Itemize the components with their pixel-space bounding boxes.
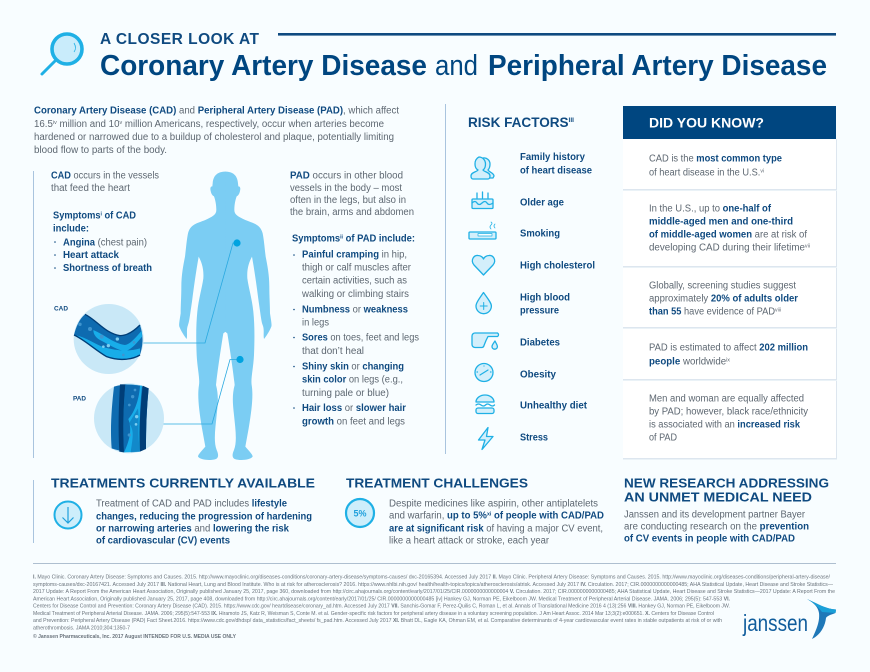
PAD description: often in the legs, but also in — [290, 195, 406, 206]
references: and Prevention: Peripheral Artery Disease (PAD) Fact Sheet.2016. https://www.cdc.gov/dhdsp/ data_statistics/fact_sheets/ fs_pad.htm. Accessed July 2017 XI. Bhatt DL, Eagle KA, Ohman EM, et al. Comparative determinants of 4-year cardiovascular event rates in stable outpatients at risk of or with — [33, 618, 722, 624]
title: Coronary Artery Disease — [100, 50, 427, 82]
card: 202 million — [623, 329, 837, 380]
illustration: CAD artery — [74, 304, 144, 374]
section: new research — [624, 476, 829, 544]
references: Medical Treatment of Peripheral Arterial Disease. JAMA. 2006; 295(5):547-553 IX. Hiramoto JS, Katz R, Weisman S, Conte M. et al. Gender-specific risk factors for peripheral artery disease in a voluntary screening population. J Am Heart Assoc. 2014 Mar 13;3(2):e000651. X. Centers for Disease Control — [33, 611, 714, 617]
risk: family history: Family history — [520, 152, 585, 163]
risk: family history: of heart disease — [520, 166, 592, 176]
title: Peripheral Artery Disease — [488, 50, 827, 82]
PAD symptoms list: certain activities, such as — [302, 276, 407, 286]
card: men and women equally affected: of PAD — [649, 432, 677, 444]
card: one-half of men: developing CAD during their lifetime — [649, 242, 809, 254]
icon: burger — [476, 395, 494, 414]
heading: risk factors: III — [569, 117, 574, 124]
PAD symptoms list: of PAD include: — [343, 234, 415, 244]
references — [33, 574, 835, 640]
references: 2017 Update: A Report From the American Heart Association, Originally published January 25, 2017, page 360, downloaded from http://circ.ahajournals.org/content/early/2017/01/25/CIR.0000000000000004 V. Circulation. 2017; CIR.0000000000000485; AHA Statistical Update, Heart Disease and Stroke Statistics—2017 Update: A Report From the — [33, 589, 835, 595]
intro text block: blood flow to parts of the body. — [34, 145, 167, 156]
PAD connector line — [163, 356, 244, 424]
references: atherothrombosis. JAMA 2010;304:1350-7 — [33, 626, 130, 632]
section: treatments currently available: Treatment of CAD and PAD includes lifestyle — [96, 498, 287, 510]
icon: down arrow — [54, 502, 82, 528]
risk: unhealthy diet: Unhealthy diet — [520, 400, 588, 412]
icon: lightning bolt — [478, 428, 493, 450]
icon: finger prick — [472, 333, 499, 349]
intro text block: 16.5 — [34, 119, 53, 130]
card: most common type — [623, 139, 837, 190]
card: 202 million: ix — [726, 358, 730, 364]
risk: family history — [520, 152, 592, 176]
section: new research: of CV events in people with CAD/PAD — [624, 534, 795, 544]
CAD symptoms list: include: — [53, 224, 89, 234]
PAD symptoms list: in legs — [302, 318, 329, 328]
PAD symptoms list: growth on feet and legs — [302, 416, 405, 428]
logo: janssen — [742, 599, 836, 639]
header: did you know: DID YOU KNOW? — [649, 114, 764, 130]
section: treatment challenges: like a heart attack or stroke, each year — [389, 536, 550, 546]
references: I. Mayo Clinic. Coronary Artery Disease: Symptoms and Causes. 2015. http://www.mayoclinic.org/diseases-conditions/coronary-artery-disease/symptoms-causes/ dxc-20165394. Accessed July 2017 II. Mayo Clinic. Peripheral Artery Disease: Symptoms and Causes. 2015. http://www.mayoclinic.org/diseases-conditions/peripheral-artery-disease/ — [33, 574, 831, 580]
risk: obesity: Obesity — [520, 370, 556, 380]
references: Centers for Disease Control and Prevention: Coronary Artery Disease (CAD). 2015. https://www.cdc.gov/ heartdisease/coronary_ad.htm. Accessed July 2017 VII. Sanchis-Gomar F, Perez-Quilis C, Roman L, et al. Annals of Translational Medicine 2016 4 (13):256 VIII. Hankey GJ, Norman PE, Eikelboom JW. — [33, 604, 730, 610]
PAD description: vessels in the body – most — [290, 183, 402, 194]
risk: diabetes: Diabetes — [520, 338, 560, 348]
icon: cigarette — [469, 222, 496, 239]
risk: high blood pressure: pressure — [520, 306, 559, 316]
section: treatments currently available: changes, reducing the progression of hardening — [96, 512, 312, 522]
title — [100, 31, 836, 82]
risk: high blood pressure: High blood — [520, 292, 570, 304]
human body silhouette — [179, 172, 272, 460]
section: treatments currently available — [51, 476, 315, 546]
PAD symptoms list: Numbness or weakness — [302, 304, 408, 316]
card: 20 percent of adults: Globally, screening studies suggest — [649, 280, 796, 292]
card: most common type: vi — [760, 168, 764, 174]
section: treatments currently available: or narrowing arteries and lowering the risk — [96, 524, 289, 534]
section: treatment challenges: TREATMENT CHALLENGES — [346, 476, 528, 490]
intro text block: Coronary Artery Disease (CAD) and Peripheral Artery Disease (PAD), which affect — [34, 106, 399, 116]
intro text block: v — [119, 120, 122, 126]
icon: birthday cake — [472, 192, 493, 208]
PAD description: the brain, arms and abdomen — [290, 207, 414, 218]
icon: family — [471, 157, 494, 179]
PAD symptoms list: that don’t heal — [302, 346, 364, 357]
CAD description: CAD occurs in the vessels — [51, 170, 159, 182]
section: new research: NEW RESEARCH ADDRESSING — [624, 476, 829, 490]
card: one-half of men: vii — [805, 244, 810, 250]
title: A CLOSER LOOK AT — [100, 31, 260, 48]
card: one-half of men — [623, 191, 837, 268]
PAD symptoms list: Hair loss or slower hair — [302, 403, 406, 414]
CAD description: that feed the heart — [51, 183, 130, 194]
section: treatments currently available: of cardiovascular (CV) events — [96, 536, 230, 546]
section: treatment challenges: of people with CAD/PAD — [491, 510, 604, 522]
card: one-half of men: of middle-aged women are at risk of — [649, 230, 807, 240]
CAD description — [51, 170, 159, 194]
references: American Heart Association, Originally published January 25, 2017, page 408, downloaded from http://circ.ahajournals.org/content/early/2017/01/25/ CIR.0000000000000485 [iv] Hankey GJ, Norman PE, Eikelboom JW. Medical Treatment of Peripheral Arterial Disease. JAMA. 2006; 295(5): 547-553 VI. — [33, 596, 731, 602]
references: © Janssen Pharmaceuticals, Inc. 2017 August INTENDED FOR U.S. MEDIA USE ONLY — [33, 633, 237, 640]
risk: smoking: Smoking — [520, 228, 560, 240]
card: most common type: CAD is the most common type — [649, 154, 782, 164]
CAD symptoms list: Symptoms — [53, 210, 104, 222]
risk: high cholesterol: High cholesterol — [520, 260, 595, 272]
intro text block — [34, 106, 399, 156]
section: new research: AN UNMET MEDICAL NEED — [624, 490, 812, 504]
CAD symptoms list: Angina (chest pain) — [63, 238, 147, 248]
heading: risk factors: RISK FACTORS — [468, 115, 568, 130]
section: treatment challenges: and warfarin, up to 5% — [389, 510, 489, 522]
card: most common type: of heart disease in the U.S. — [649, 168, 770, 178]
icon: 5 percent badge: 5% — [354, 508, 366, 518]
section: new research: Janssen and its development partner Bayer — [624, 510, 806, 520]
card: 20 percent of adults — [623, 268, 837, 328]
intro text block: hardened or narrowed due to a buildup of cholesterol and plaque, potentially limiting — [34, 132, 394, 143]
PAD symptoms list: ii — [340, 234, 343, 240]
PAD symptoms list: turning pale or blue) — [302, 388, 389, 399]
card: one-half of men: middle-aged men and one-third — [649, 216, 793, 228]
PAD symptoms list: Sores on toes, feet and legs — [302, 332, 419, 344]
icon: 5 percent badge — [346, 499, 374, 527]
PAD symptoms list — [292, 234, 419, 428]
PAD symptoms list: skin color on legs (e.g., — [302, 374, 403, 386]
icon: magnifying glass — [42, 34, 82, 74]
risk: high blood pressure — [520, 292, 570, 316]
PAD symptoms list: walking or climbing stairs — [301, 289, 409, 300]
PAD symptoms list: Symptoms — [292, 234, 343, 244]
illustration: PAD artery — [94, 383, 164, 453]
intro text block: million and 10 — [57, 119, 120, 130]
intro text block: million Americans, respectively, occur when arteries become — [122, 119, 384, 130]
logo: janssen: janssen — [742, 610, 808, 636]
title: and — [435, 50, 478, 82]
icon: heart — [472, 255, 495, 275]
card: 202 million: people worldwide — [649, 356, 728, 368]
label: CAD: CAD — [54, 306, 68, 312]
label: PAD: PAD — [73, 396, 86, 402]
icon: blood drop — [476, 292, 491, 314]
icon: scale gauge — [475, 364, 493, 382]
risk: stress: Stress — [520, 432, 548, 444]
section: new research: are conducting research on the prevention — [624, 522, 809, 532]
PAD description: PAD occurs in other blood — [290, 170, 403, 182]
references: symptoms-causes/dxc-20167421. Accessed July 2017 III. National Heart, Lung and Blood Institute. Who is at risk for atherosclerosis? 2016. https://www.nhlbi.nih.gov/ health/health-topics/topics/atherosclerosis/atrisk. Accessed July 2017 IV. Circulation. 2017; CIR.0000000000000485; AHA Statistical Update, Heart Disease and Stroke Statistics— — [33, 582, 834, 588]
CAD symptoms list: Heart attack — [63, 250, 119, 261]
section: treatment challenges: are at significant risk of having a major CV event, — [389, 524, 603, 534]
card: men and women equally affected: Men and woman are equally affected — [649, 394, 804, 404]
PAD symptoms list: thigh or calf muscles after — [302, 262, 412, 274]
PAD description — [290, 170, 414, 218]
card: 202 million: PAD is estimated to affect 202 million — [649, 342, 808, 354]
CAD connector line — [143, 239, 241, 343]
CAD symptoms list: Shortness of breath — [63, 263, 152, 274]
section: treatments currently available: TREATMENTS CURRENTLY AVAILABLE — [51, 476, 315, 490]
section: treatment challenges: xi — [487, 512, 492, 518]
CAD symptoms list: i — [101, 212, 102, 218]
card: one-half of men: In the U.S., up to one-half of — [649, 204, 772, 214]
section: treatment challenges: Despite medicines like aspirin, other antiplatelets — [389, 498, 598, 510]
header: did you know — [623, 106, 836, 139]
card: 20 percent of adults: than 55 have evidence of PAD — [649, 306, 782, 318]
CAD symptoms list — [53, 210, 152, 274]
card: 20 percent of adults: viii — [775, 308, 781, 314]
intro text block: iv — [53, 120, 57, 126]
PAD symptoms list: Painful cramping in hip, — [302, 250, 407, 260]
CAD symptoms list: of CAD — [102, 210, 136, 222]
card: men and women equally affected: by PAD; however, black race/ethnicity — [649, 406, 808, 418]
card: men and women equally affected — [623, 381, 837, 460]
risk: older age: Older age — [520, 198, 564, 208]
PAD symptoms list: Shiny skin or changing — [302, 362, 404, 372]
card: 20 percent of adults: approximately 20% of adults older — [649, 294, 798, 304]
section: treatment challenges — [346, 476, 604, 546]
card: men and women equally affected: is associated with an increased risk — [649, 420, 800, 430]
